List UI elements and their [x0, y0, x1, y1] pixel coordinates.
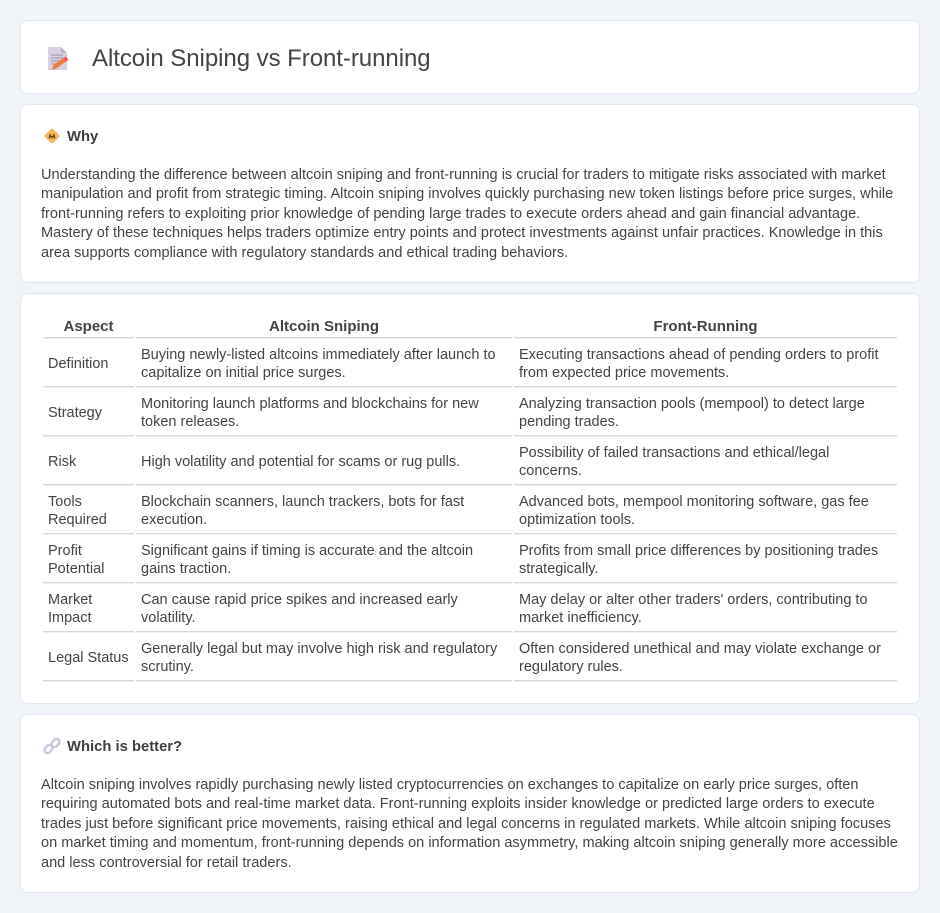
row: profit potential: Profits from small price differences by positioning trades — [519, 543, 878, 559]
row: strategy: Analyzing transaction pools (mempool) to detect large — [519, 396, 865, 412]
row: legal status: scrutiny. — [141, 659, 194, 675]
row: profit potential: Potential — [48, 561, 104, 577]
row: strategy: pending trades. — [519, 414, 619, 430]
row: definition — [48, 347, 879, 381]
why text: Understanding the difference between altcoin sniping and front-running is crucial for traders to mitigate risks associated with market — [41, 167, 886, 183]
which is better text: on market timing and momentum, front-running depends on information asymmetry, making altcoin sniping generally more accessible — [41, 835, 898, 851]
row: tools required: Required — [48, 512, 107, 528]
row: risk: High volatility and potential for scams or rug pulls. — [141, 454, 460, 470]
why text — [41, 167, 893, 261]
which is better text — [41, 777, 898, 871]
row: definition: Executing transactions ahead of pending orders to profit — [519, 347, 879, 363]
row: legal status — [48, 641, 881, 675]
row: strategy — [48, 396, 865, 430]
icon: warning diamond — [44, 128, 60, 144]
row: tools required — [48, 494, 869, 528]
header panel — [20, 20, 920, 94]
row: tools required: Tools — [48, 494, 82, 510]
row: legal status: Often considered unethical and may violate exchange or — [519, 641, 881, 657]
icon: document with pencil — [48, 47, 68, 70]
row: risk: Risk — [48, 454, 76, 470]
why text: Mastery of these techniques helps traders optimize entry points and protect investments against unfair practices. Knowledge in this — [41, 225, 883, 241]
row: strategy: token releases. — [141, 414, 239, 430]
table header — [63, 318, 758, 335]
row: strategy: Strategy — [48, 405, 102, 421]
row: tools required: optimization tools. — [519, 512, 635, 528]
row: market impact — [48, 592, 868, 626]
row: tools required: execution. — [141, 512, 207, 528]
which is better text: trades just before significant price movements, raising ethical and legal concerns in regulated markets. While altcoin sniping focuses — [41, 816, 891, 832]
row: market impact: Impact — [48, 610, 92, 626]
row: legal status: regulatory rules. — [519, 659, 623, 675]
table header: Aspect — [63, 318, 114, 335]
row: profit potential — [48, 543, 878, 577]
table header: Altcoin Sniping — [269, 318, 379, 335]
panel: why — [20, 104, 920, 283]
row: profit potential: strategically. — [519, 561, 599, 577]
row: risk — [48, 445, 829, 479]
row: market impact: May delay or alter other traders' orders, contributing to — [519, 592, 868, 608]
row: legal status: Generally legal but may involve high risk and regulatory — [141, 641, 497, 657]
which is better text: requiring automated bots and real-time market data. Front-running exploits insider knowledge or predicted large orders to execute — [41, 796, 875, 812]
row: risk: Possibility of failed transactions and ethical/legal — [519, 445, 829, 461]
row: profit potential: Profit — [48, 543, 82, 559]
row: market impact: Market — [48, 592, 92, 608]
row: definition: Buying newly-listed altcoins immediately after launch to — [141, 347, 496, 363]
icon: chain link — [43, 738, 61, 754]
why text: manipulation and profit from strategic timing. Altcoin sniping involves quickly purchasing new token listings before price surges, while — [41, 186, 893, 202]
row: risk: concerns. — [519, 463, 582, 479]
title: Altcoin Sniping vs Front-running — [92, 45, 431, 72]
heading: why: Why — [67, 129, 98, 145]
row: profit potential: Significant gains if timing is accurate and the altcoin — [141, 543, 473, 559]
row: market impact: market inefficiency. — [519, 610, 642, 626]
row: strategy: Monitoring launch platforms and blockchains for new — [141, 396, 479, 412]
row: tools required: Blockchain scanners, launch trackers, bots for fast — [141, 494, 464, 510]
why text: area supports compliance with regulatory standards and ethical trading behaviors. — [41, 245, 568, 261]
row: legal status: Legal Status — [48, 650, 129, 666]
row: market impact: volatility. — [141, 610, 196, 626]
which is better text: and less controversial for retail traders. — [41, 855, 292, 871]
why text: front-running refers to exploiting prior knowledge of pending large trades to execute orders ahead and gain financial advantage. — [41, 206, 860, 222]
which is better text: Altcoin sniping involves rapidly purchasing newly listed cryptocurrencies on exchanges to capitalize on early price surges, often — [41, 777, 858, 793]
panel: which is better — [20, 714, 920, 893]
row: tools required: Advanced bots, mempool monitoring software, gas fee — [519, 494, 869, 510]
row: market impact: Can cause rapid price spikes and increased early — [141, 592, 458, 608]
row: definition: from expected price movements. — [519, 365, 729, 381]
table header: Front-Running — [653, 318, 758, 335]
panel: comparison table — [20, 293, 920, 704]
row: definition: Definition — [48, 356, 108, 372]
row: definition: capitalize on initial price surges. — [141, 365, 346, 381]
row: profit potential: gains traction. — [141, 561, 231, 577]
heading: which is better: Which is better? — [67, 739, 182, 755]
